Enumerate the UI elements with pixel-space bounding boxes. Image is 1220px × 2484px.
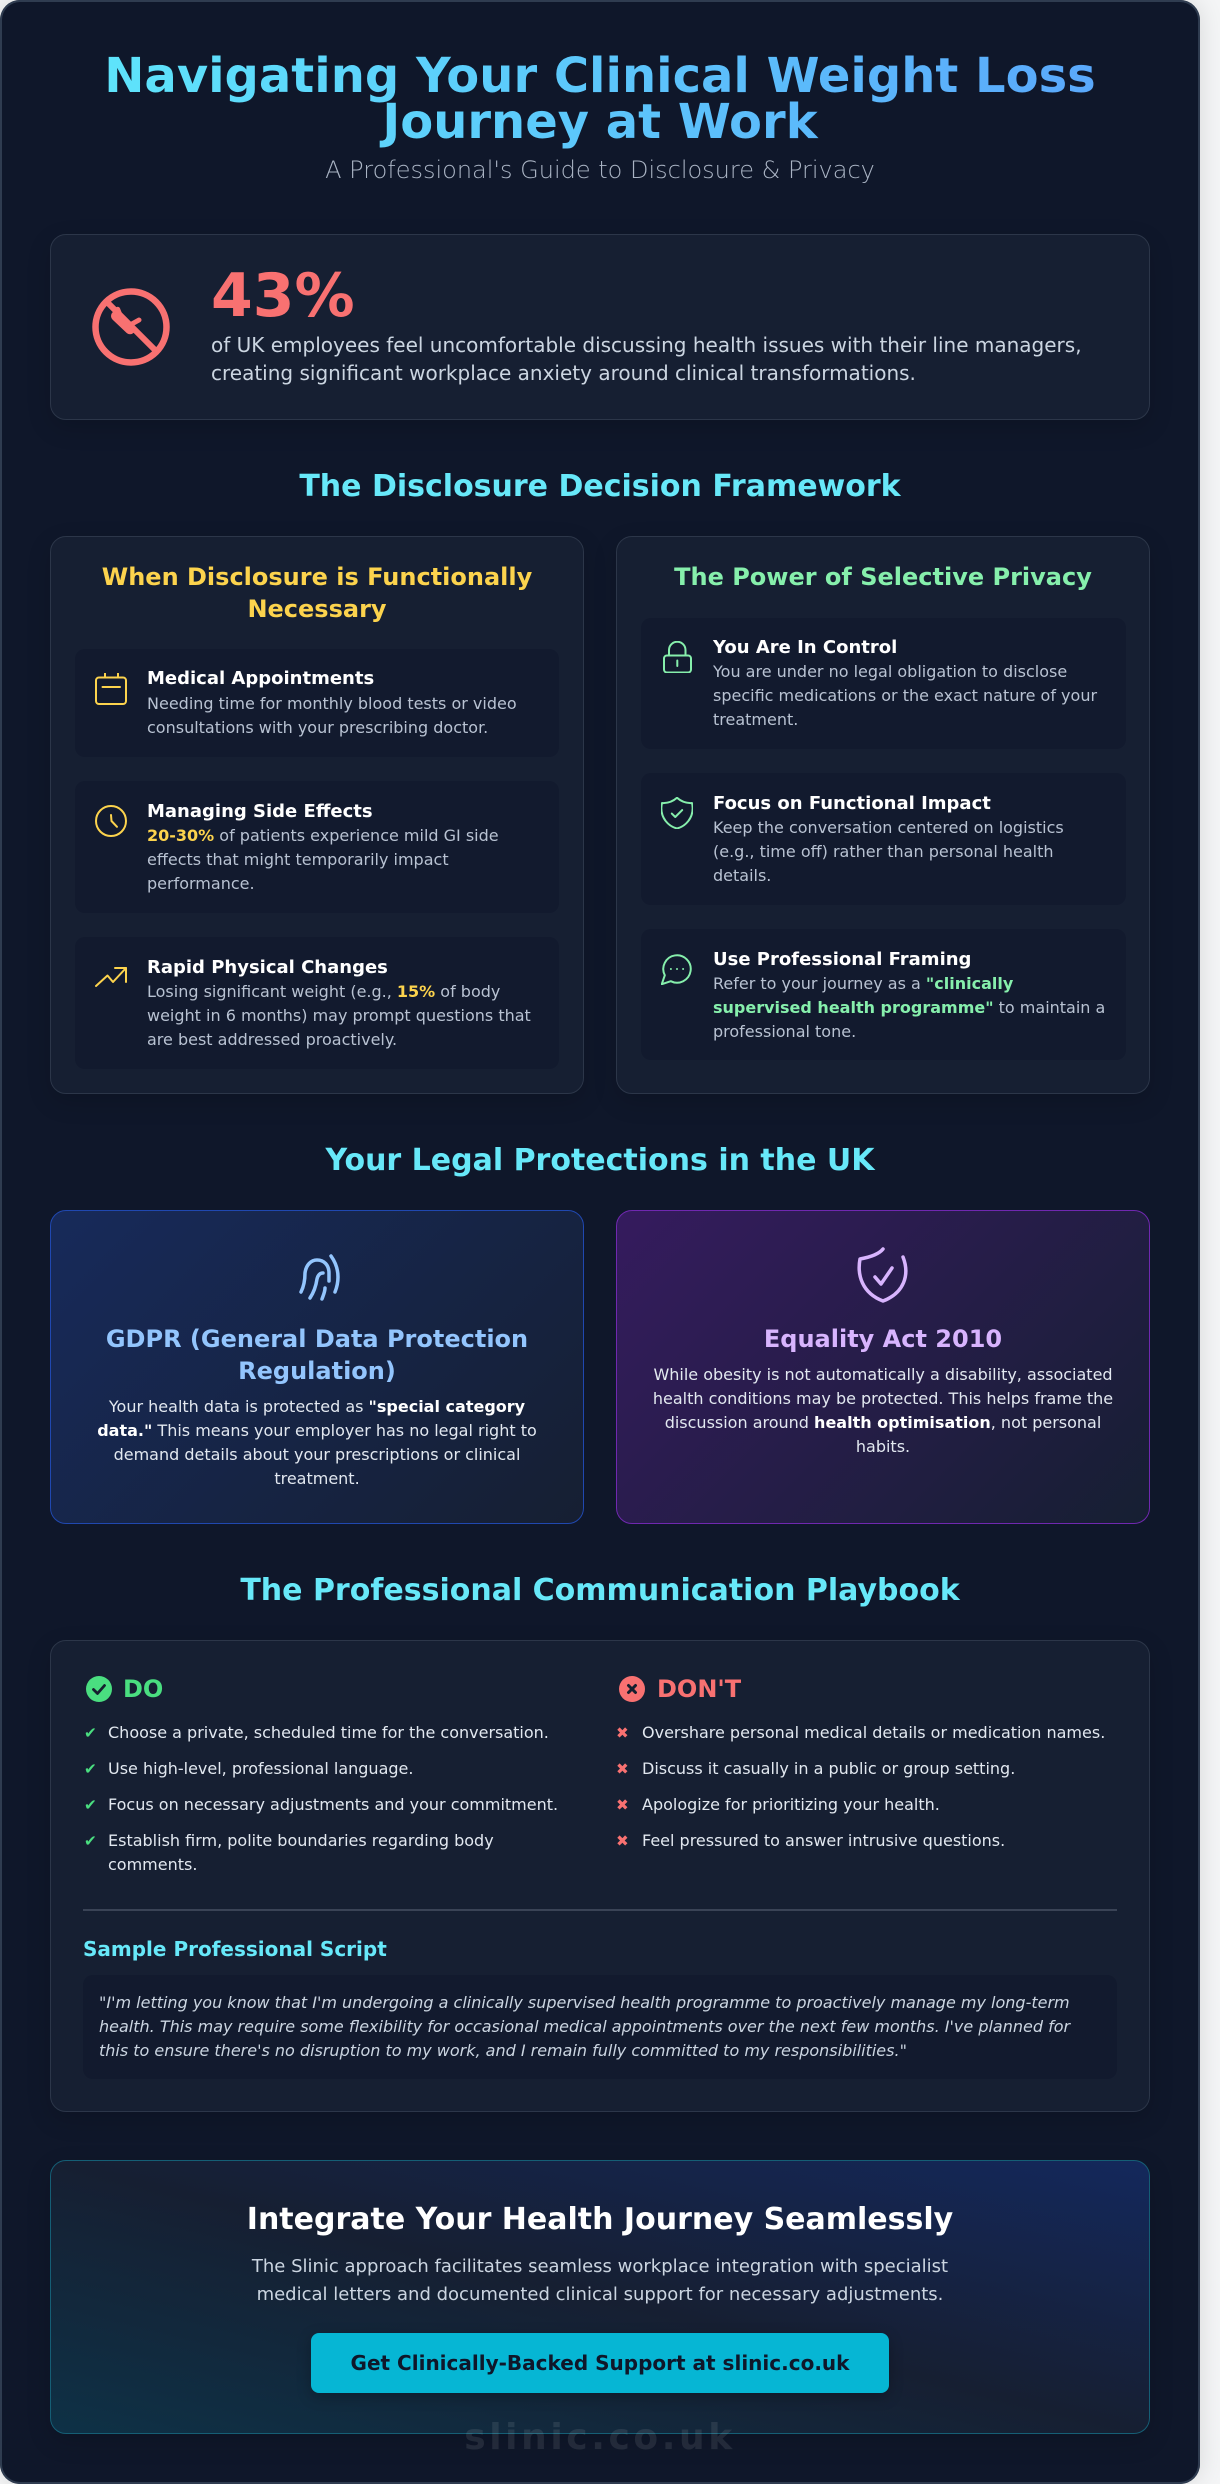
- subtitle: A Professional's Guide to Disclosure & Privacy: [325, 156, 875, 184]
- heading: legal protections: Your Legal Protections in the UK: [325, 1143, 875, 1178]
- panel heading: functionally necessary: [102, 563, 532, 623]
- text: medical appointments: consultations with your prescribing doctor.: [147, 718, 488, 737]
- script quote text: "I'm letting you know that I'm undergoing a clinically supervised health programme to proactively manage my long-term: [99, 1993, 1070, 2012]
- text: managing side effects: performance.: [147, 874, 255, 893]
- item: use professional framing: [641, 929, 1126, 1060]
- text: use professional framing: Refer to your journey as a "clinically: [713, 974, 1013, 993]
- text: rapid physical changes: are best addressed proactively.: [147, 1030, 397, 1049]
- text: rapid physical changes: [147, 957, 531, 1049]
- panel: when disclosure is necessary: [50, 536, 584, 1094]
- script quote text: this to ensure there's no disruption to my work, and I remain fully committed to my responsibilities.": [99, 2041, 907, 2060]
- GDPR heading: [106, 1325, 528, 1385]
- statistic: 43%: 43%: [211, 261, 355, 331]
- icon: clock: [95, 805, 127, 837]
- GDPR heading: GDPR (General Data Protection: [106, 1325, 528, 1353]
- GDPR text: [97, 1397, 537, 1488]
- DON'T list: ✖: [616, 1796, 629, 1814]
- title: [50, 53, 1150, 155]
- script quote text: health. This may require some flexibility for occasional medical appointments over the next few months. I've planned for: [99, 2017, 1070, 2036]
- text: managing side effects: 20-30% of patients experience mild GI side: [147, 826, 499, 845]
- text: medical appointments: Medical Appointments: [147, 668, 374, 689]
- DON'T list: ✖: [616, 1760, 629, 1778]
- item: rapid physical changes: [75, 937, 559, 1069]
- panel: selective privacy: [616, 536, 1150, 1094]
- text: use professional framing: [713, 949, 1105, 1041]
- DO list: ✔: [84, 1724, 97, 1742]
- DO heading: DO: [123, 1675, 163, 1703]
- Equality Act heading: Equality Act 2010: [764, 1325, 1002, 1353]
- text: use professional framing: professional tone.: [713, 1022, 856, 1041]
- text: managing side effects: effects that might temporarily impact: [147, 850, 449, 869]
- text: focus on functional impact: (e.g., time off) rather than personal health: [713, 842, 1054, 861]
- Equality Act text: health conditions may be protected. This helps frame the: [653, 1389, 1113, 1408]
- DO list: Focus on necessary adjustments and your commitment.: [108, 1795, 558, 1814]
- text: focus on functional impact: details.: [713, 866, 771, 885]
- text: focus on functional impact: Focus on Functional Impact: [713, 793, 991, 814]
- DO column: [84, 1675, 558, 1874]
- icon: fingerprint: [299, 1254, 340, 1301]
- title: Journey at Work: [382, 94, 818, 150]
- DON'T list: Apologize for prioritizing your health.: [642, 1795, 940, 1814]
- DO list: ✔: [84, 1832, 97, 1850]
- icon: speech bubble: [661, 954, 692, 985]
- text: you are in control: specific medications or the exact nature of your: [713, 686, 1097, 705]
- DO list: Use high-level, professional language.: [108, 1759, 413, 1778]
- item: focus on functional impact: [641, 773, 1126, 905]
- panel: key statistic: [50, 234, 1150, 420]
- DO list: ✔: [84, 1796, 97, 1814]
- text: use professional framing: supervised health programme" to maintain a: [713, 998, 1105, 1017]
- DON'T list: Feel pressured to answer intrusive questions.: [642, 1831, 1005, 1850]
- title: Navigating Your Clinical Weight Loss: [104, 48, 1096, 104]
- text: managing side effects: [147, 801, 499, 893]
- statistic description: of UK employees feel uncomfortable discussing health issues with their line managers,: [211, 333, 1082, 357]
- DO list: Choose a private, scheduled time for the conversation.: [108, 1723, 549, 1742]
- DO list: comments.: [108, 1855, 197, 1874]
- DON'T list: Overshare personal medical details or medication names.: [642, 1723, 1105, 1742]
- GDPR text: data." This means your employer has no legal right to: [97, 1421, 537, 1440]
- GDPR heading: Regulation): [238, 1357, 396, 1385]
- panel heading: functionally necessary: When Disclosure is Functionally: [102, 563, 532, 591]
- icon: calendar: [95, 673, 127, 705]
- script quote text: [99, 1993, 1071, 2060]
- item: you are in control: [641, 618, 1126, 749]
- text: rapid physical changes: Losing significant weight (e.g., 15% of body: [147, 982, 500, 1001]
- text: rapid physical changes: Rapid Physical Changes: [147, 957, 388, 978]
- CTA text: [252, 2256, 948, 2305]
- GDPR text: treatment.: [274, 1469, 360, 1488]
- text: you are in control: You Are In Control: [713, 637, 897, 658]
- Equality Act text: discussion around health optimisation, not personal: [665, 1413, 1101, 1432]
- text: use professional framing: Use Professional Framing: [713, 949, 971, 970]
- panel heading: selective privacy: The Power of Selective Privacy: [674, 563, 1092, 591]
- panel: GDPR: [50, 1210, 584, 1524]
- statistic description: [211, 333, 1082, 385]
- DO list: ✔: [84, 1760, 97, 1778]
- icon: do check: [86, 1676, 112, 1702]
- DON'T list: Discuss it casually in a public or group setting.: [642, 1759, 1015, 1778]
- text: focus on functional impact: [713, 793, 1064, 885]
- CTA button: Get Clinically-Backed Support at slinic.co.uk: [351, 2351, 849, 2375]
- statistic description: creating significant workplace anxiety around clinical transformations.: [211, 361, 916, 385]
- icon: trending up: [95, 967, 127, 987]
- CTA heading: Integrate Your Health Journey Seamlessly: [247, 2202, 953, 2237]
- script quote box: [83, 1975, 1117, 2079]
- Equality Act text: While obesity is not automatically a disability, associated: [653, 1365, 1113, 1384]
- Equality Act text: [653, 1365, 1113, 1456]
- script heading: Sample Professional Script: [83, 1937, 387, 1961]
- DO list: [84, 1723, 558, 1874]
- icon: don't cross: [619, 1676, 645, 1702]
- panel: call to action: [50, 2160, 1150, 2434]
- heading: framework: The Disclosure Decision Framework: [299, 469, 901, 504]
- text: you are in control: [712, 637, 1098, 729]
- icon: lock: [663, 641, 692, 673]
- heading: playbook: The Professional Communication Playbook: [240, 1573, 960, 1608]
- icon: shield check: [661, 797, 693, 829]
- GDPR text: Your health data is protected as "special category: [109, 1397, 525, 1416]
- panel: Equality Act: [616, 1210, 1150, 1524]
- DON'T list: ✖: [616, 1832, 629, 1850]
- item: medical appointments: [75, 649, 559, 757]
- icon: shield with check: [857, 1247, 908, 1303]
- item: managing side effects: [75, 781, 559, 913]
- text: managing side effects: Managing Side Effects: [147, 801, 373, 822]
- DON'T list: ✖: [616, 1724, 629, 1742]
- DON'T heading: DON'T: [657, 1675, 741, 1703]
- text: rapid physical changes: weight in 6 months) may prompt questions that: [147, 1006, 531, 1025]
- GDPR text: demand details about your prescriptions or clinical: [114, 1445, 520, 1464]
- panel heading: functionally necessary: Necessary: [247, 595, 387, 623]
- CTA button: [311, 2333, 889, 2393]
- DON'T column: [616, 1675, 1105, 1850]
- panel: playbook: [50, 1640, 1150, 2112]
- CTA text: medical letters and documented clinical support for necessary adjustments.: [257, 2284, 943, 2305]
- text: focus on functional impact: Keep the conversation centered on logistics: [713, 818, 1064, 837]
- text: you are in control: treatment.: [713, 710, 798, 729]
- icon: prohibited symbol: [92, 288, 170, 366]
- DON'T list: [616, 1723, 1105, 1850]
- DO list: Establish firm, polite boundaries regarding body: [108, 1831, 494, 1850]
- Equality Act text: habits.: [856, 1437, 910, 1456]
- text: you are in control: You are under no legal obligation to disclose: [713, 662, 1067, 681]
- watermark: slinic.co.uk: [464, 2417, 736, 2458]
- CTA text: The Slinic approach facilitates seamless workplace integration with specialist: [252, 2256, 948, 2277]
- text: medical appointments: Needing time for monthly blood tests or video: [147, 694, 517, 713]
- text: medical appointments: [147, 668, 517, 737]
